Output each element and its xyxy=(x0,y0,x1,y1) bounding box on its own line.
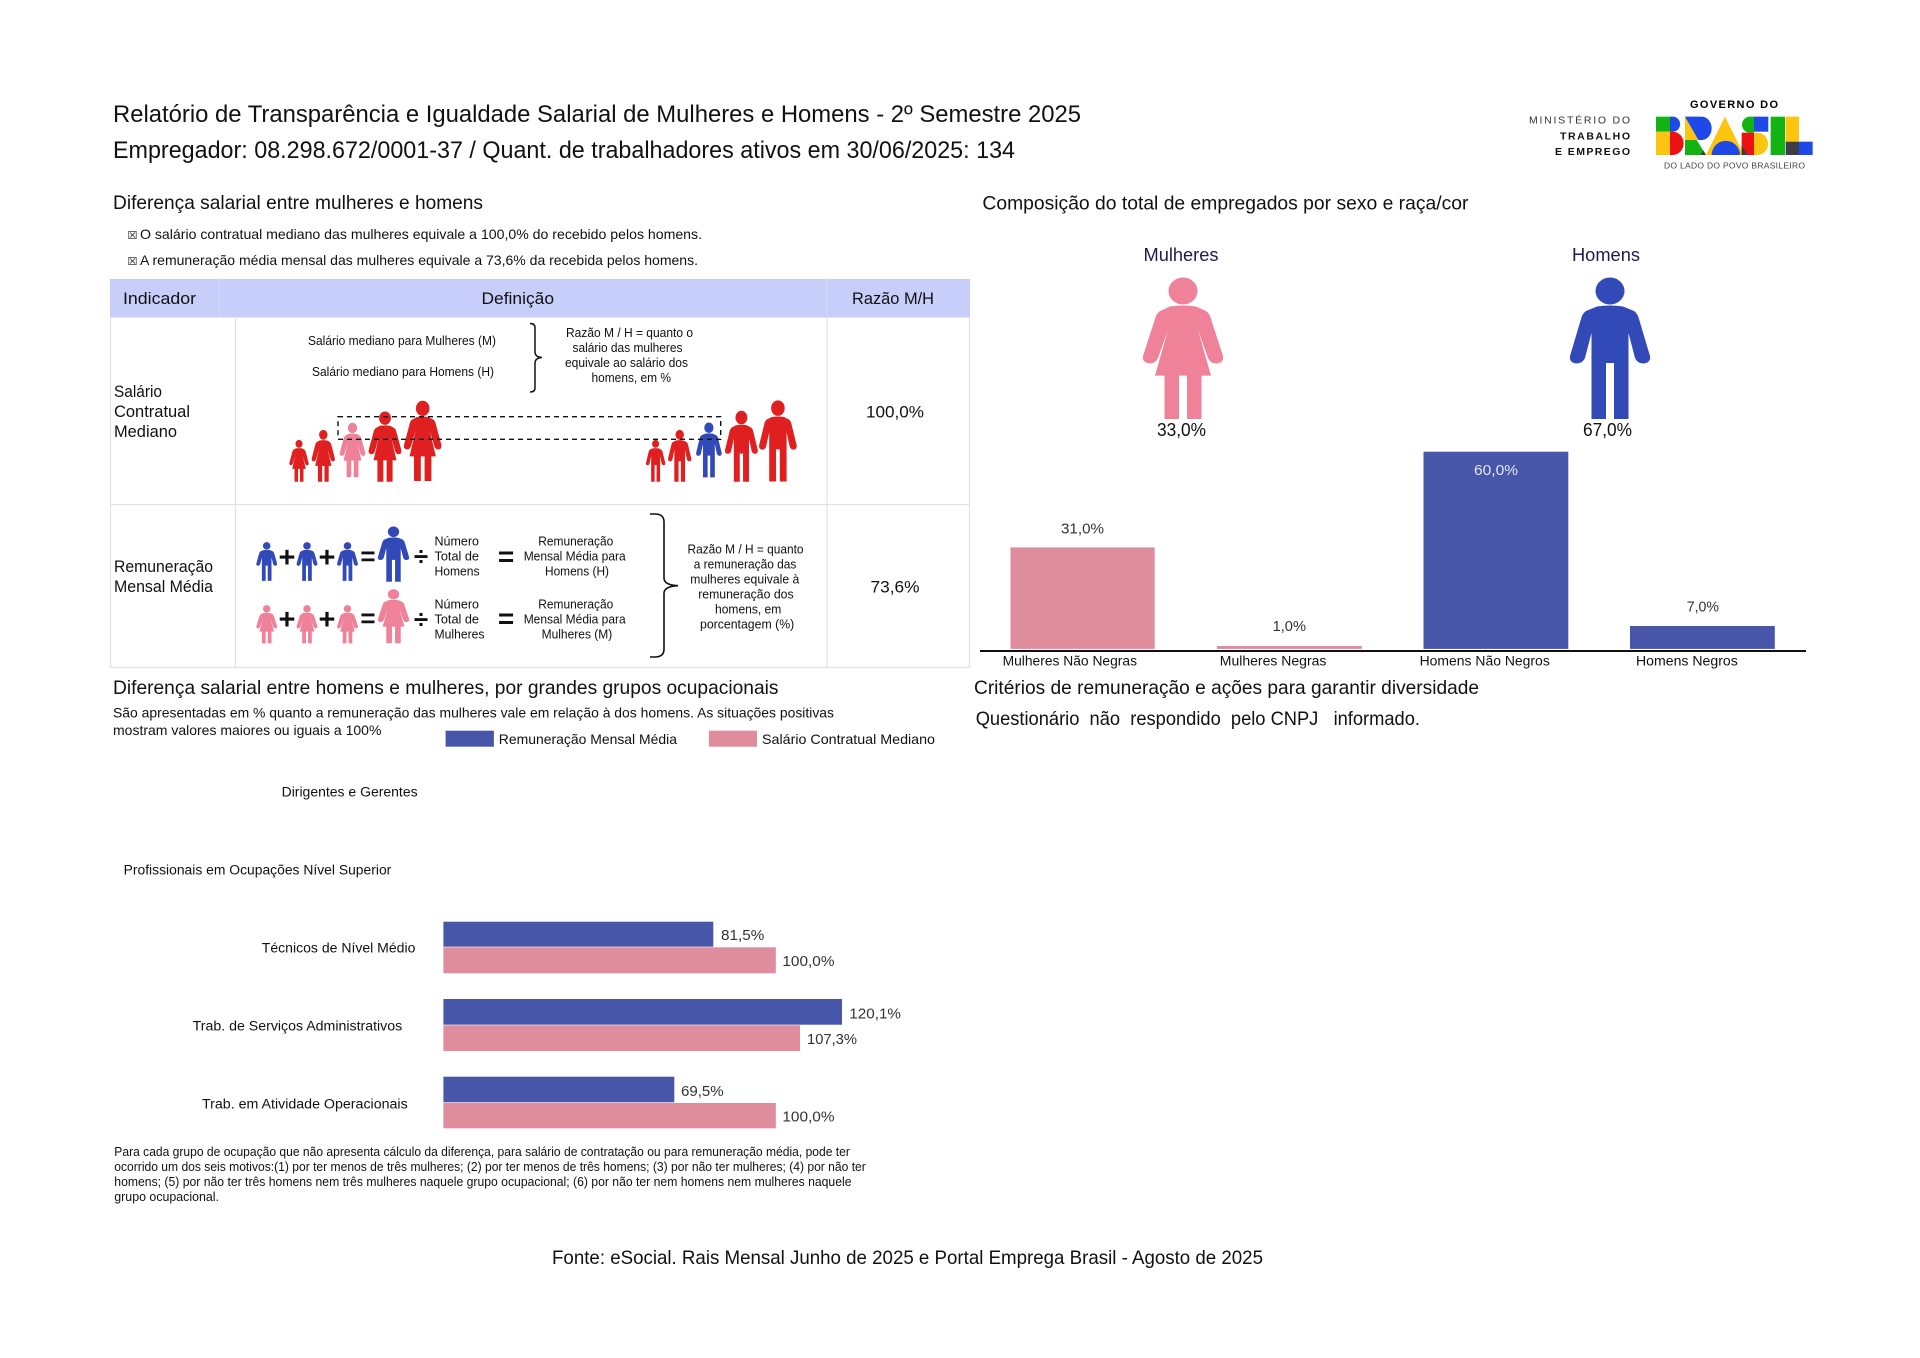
formula: women: + xyxy=(319,604,335,636)
row label: remuneração mensal média: Remuneração xyxy=(114,557,213,576)
bar chart: grupos ocupacionais xyxy=(124,785,901,1128)
table header: Indicador xyxy=(123,289,196,308)
row label: remuneração mensal média: Mensal Média xyxy=(114,577,214,596)
formula: women: = xyxy=(498,603,514,634)
axis labels: Mulheres Não Negras xyxy=(1003,653,1137,668)
explanation: razão mediana xyxy=(565,326,693,385)
row label: salário contratual mediano: Mediano xyxy=(114,422,177,441)
text: nota explicativa: São apresentadas em % quanto a remuneração das mulheres vale em relação à dos homens. As situações positivas xyxy=(113,705,834,721)
explanation: razão média: remuneração dos xyxy=(698,587,794,601)
logo: ministério e governo do Brasil: MINISTÉRIO DO xyxy=(1529,114,1630,126)
row label: salário contratual mediano xyxy=(114,382,190,441)
row label: salário contratual mediano: Salário xyxy=(114,382,162,401)
formula: men: Número xyxy=(434,535,479,549)
heading: grupos ocupacionais: Diferença salarial entre homens e mulheres, por grandes grupos ocupacionais xyxy=(113,677,779,699)
explanation: razão média: a remuneração das xyxy=(694,557,796,571)
title: Relatório de Transparência e Igualdade Salarial de Mulheres e Homens - 2º Semestre 2025 xyxy=(113,101,1081,128)
formula: women: Total de xyxy=(434,612,479,626)
formula: women: Mulheres xyxy=(434,627,484,641)
formula: men: ÷ xyxy=(414,541,428,571)
source line: Fonte: eSocial. Rais Mensal Junho de 2025 e Portal Emprega Brasil - Agosto de 2025 xyxy=(552,1247,1263,1269)
legend: Salário Contratual Mediano xyxy=(762,731,935,747)
category: atividade operacionais: Trab. em Atividade Operacionais xyxy=(202,1096,408,1111)
category: atividade operacionais: 100,0% xyxy=(782,1110,835,1126)
formula: women: Número xyxy=(434,597,479,611)
icons: women ordered by salary xyxy=(289,401,442,482)
panel: men share: 67,0% xyxy=(1583,420,1632,440)
logo: ministério e governo do Brasil: GOVERNO DO xyxy=(1690,99,1778,111)
formula: women: Mulheres (M) xyxy=(542,627,612,641)
panel: women share: Mulheres xyxy=(1144,244,1218,265)
category: serviços administrativos: 107,3% xyxy=(807,1032,857,1048)
explanation: razão média: Razão M / H = quanto xyxy=(688,542,804,556)
formula: women: ÷ xyxy=(414,604,428,634)
category: profissionais: Profissionais em Ocupações Nível Superior xyxy=(124,862,392,877)
formula: men: = xyxy=(360,541,376,571)
axis labels: Homens Negros xyxy=(1636,653,1738,668)
bar: mulheres não negras xyxy=(1010,522,1155,649)
explanation: razão média: homens, em xyxy=(715,602,781,616)
legend xyxy=(446,731,935,747)
category: atividade operacionais: 69,5% xyxy=(681,1084,724,1100)
table header xyxy=(110,279,970,318)
panel: women share: 33,0% xyxy=(1157,420,1206,440)
footnote: homens; (5) por não ter três homens nem três mulheres naquele grupo ocupacional; (6) por não ter nem homens nem mulheres naquele xyxy=(114,1175,852,1189)
legend: Remuneração Mensal Média xyxy=(499,731,677,747)
category: serviços administrativos: 120,1% xyxy=(849,1006,901,1022)
formula: women xyxy=(256,589,626,643)
formula: men: Total de xyxy=(434,550,479,564)
value: 100,0%: 100,0% xyxy=(866,402,924,422)
logo: ministério e governo do Brasil: TRABALHO xyxy=(1560,130,1630,142)
logo: ministério e governo do Brasil: DO LADO DO POVO BRASILEIRO xyxy=(1664,160,1805,170)
explanation: razão mediana: salário das mulheres xyxy=(572,341,682,355)
formula: women: + xyxy=(279,604,295,636)
category: técnicos: Técnicos de Nível Médio xyxy=(262,940,415,955)
formula: women: Mensal Média para xyxy=(524,612,626,626)
category: atividade operacionais xyxy=(202,1077,835,1128)
heading: critérios: Critérios de remuneração e ações para garantir diversidade xyxy=(974,677,1479,699)
formula: men xyxy=(256,527,626,582)
explanation: razão média xyxy=(688,542,804,631)
heading: diferença salarial: Diferença salarial entre mulheres e homens xyxy=(113,192,483,214)
bar chart: composição por sexo e raça xyxy=(980,452,1806,668)
formula: men: + xyxy=(279,542,295,574)
logo: ministério e governo do Brasil xyxy=(1529,99,1813,170)
formula: men: = xyxy=(498,541,514,572)
bar: mulheres não negras: 31,0% xyxy=(1061,522,1104,538)
panel: women share xyxy=(1143,244,1223,440)
row label: remuneração mensal média xyxy=(114,557,214,596)
category: técnicos xyxy=(262,922,835,973)
brace: average xyxy=(650,514,678,657)
text: questionário: Questionário não respondido pelo CNPJ informado. xyxy=(976,708,1420,730)
category: serviços administrativos xyxy=(193,999,901,1051)
category: serviços administrativos: Trab. de Serviços Administrativos xyxy=(193,1018,402,1033)
explanation: razão mediana: homens, em % xyxy=(592,371,671,385)
brace: median xyxy=(530,324,542,392)
axis labels xyxy=(1003,653,1738,668)
explanation: razão mediana: equivale ao salário dos xyxy=(565,356,688,370)
formula: men: Mensal Média para xyxy=(524,550,626,564)
panel: indicator table xyxy=(110,279,970,668)
bar: homens negros: 7,0% xyxy=(1687,600,1719,616)
title xyxy=(113,101,1081,164)
bar: homens não negros xyxy=(1424,452,1568,649)
bar: homens negros xyxy=(1630,600,1775,649)
axis labels: Homens Não Negros xyxy=(1420,653,1550,668)
table header: Definição xyxy=(482,289,554,308)
text: nota explicativa: mostram valores maiores ou iguais a 100% xyxy=(113,722,381,738)
key findings bullets: ☒ xyxy=(128,229,137,242)
key findings bullets: ☒ xyxy=(128,255,137,268)
table header: Razão M/H xyxy=(852,289,934,308)
text: nota explicativa xyxy=(113,705,834,738)
category: técnicos: 81,5% xyxy=(721,928,764,944)
title: Empregador: 08.298.672/0001-37 / Quant. de trabalhadores ativos em 30/06/2025: 134 xyxy=(113,137,1015,164)
formula: men: Homens (H) xyxy=(545,565,609,579)
table grid xyxy=(110,317,970,668)
definition: salário mediano: Salário mediano para Mulheres (M) xyxy=(308,334,496,348)
value: 73,6%: 73,6% xyxy=(870,578,920,597)
axis line xyxy=(980,650,1806,652)
explanation: razão média: porcentagem (%) xyxy=(700,617,794,631)
footnote: grupo ocupacional. xyxy=(114,1190,219,1204)
footnote: Para cada grupo de ocupação que não apresenta cálculo da diferença, para salário de contratação ou para remuneração média, pode ter xyxy=(114,1145,850,1159)
panel: men share xyxy=(1570,244,1650,440)
formula: men: + xyxy=(319,542,335,574)
definition: salário mediano: Salário mediano para Homens (H) xyxy=(312,365,494,379)
key findings bullets xyxy=(128,226,702,268)
bar: mulheres negras: 1,0% xyxy=(1273,619,1306,635)
dashed median link xyxy=(338,417,721,439)
row label: salário contratual mediano: Contratual xyxy=(114,402,190,421)
axis labels: Mulheres Negras xyxy=(1220,653,1327,668)
formula: men: Remuneração xyxy=(538,535,613,549)
heading: composição: Composição do total de empregados por sexo e raça/cor xyxy=(982,192,1469,214)
key findings bullets: O salário contratual mediano das mulheres equivale a 100,0% do recebido pelos homens. xyxy=(140,226,702,242)
explanation: razão média: mulheres equivale à xyxy=(690,572,799,586)
icons: men ordered by salary xyxy=(646,400,797,482)
footnote: ocorrido um dos seis motivos:(1) por ter menos de três mulheres; (2) por ter menos de três homens; (3) por não ter mulheres; (4) por não ter xyxy=(114,1160,866,1174)
explanation: razão mediana: Razão M / H = quanto o xyxy=(566,326,693,340)
definition: salário mediano xyxy=(308,334,496,379)
formula: men: Homens xyxy=(434,565,480,579)
logo: ministério e governo do Brasil: E EMPREGO xyxy=(1555,146,1630,158)
formula: women: Remuneração xyxy=(538,597,613,611)
key findings bullets: A remuneração média mensal das mulheres equivale a 73,6% da recebida pelos homens. xyxy=(140,252,698,268)
category: dirigentes: Dirigentes e Gerentes xyxy=(282,785,418,800)
bar: homens não negros: 60,0% xyxy=(1474,463,1518,479)
footnote xyxy=(114,1145,866,1204)
formula: women: = xyxy=(360,603,376,633)
panel: men share: Homens xyxy=(1572,244,1640,265)
category: técnicos: 100,0% xyxy=(782,954,835,970)
